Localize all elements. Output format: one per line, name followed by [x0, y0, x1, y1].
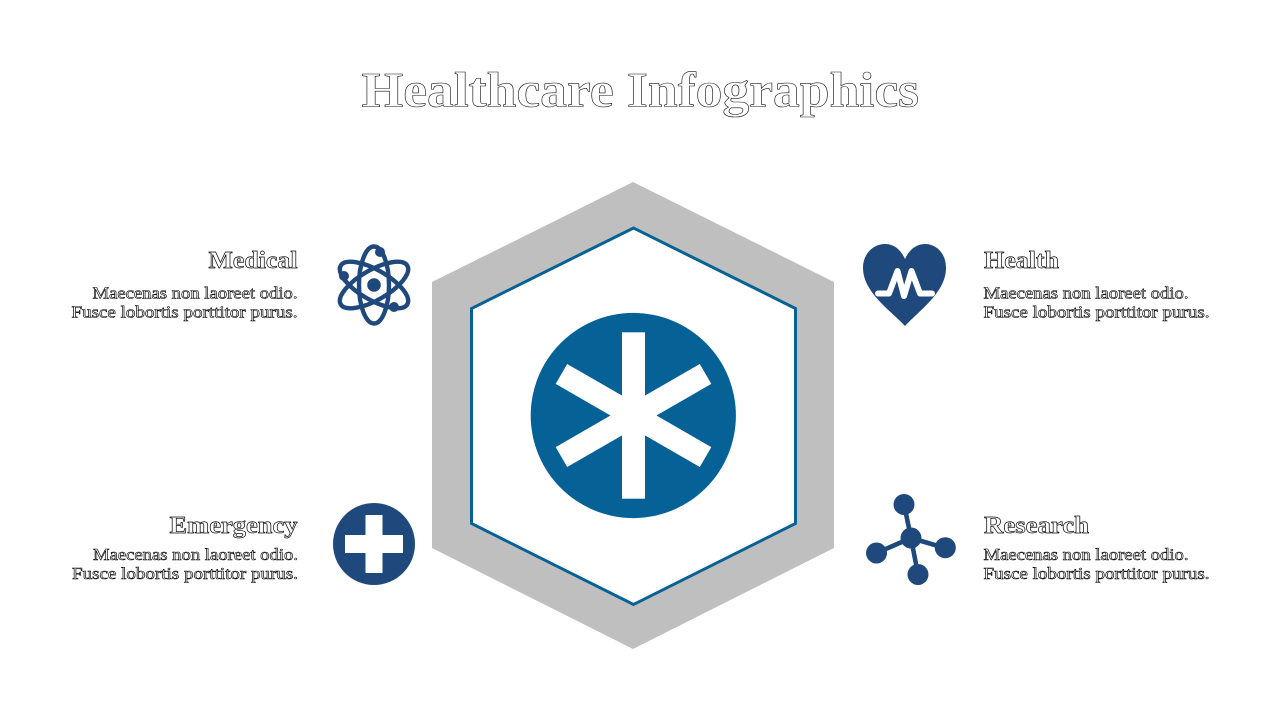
- icon: medical cross: [333, 503, 415, 585]
- text block: research: Maecenas non laoreet odio.: [984, 545, 1188, 564]
- panel: health: [863, 244, 1210, 326]
- panel: medical: [72, 246, 415, 324]
- heading: medical: Medical: [208, 248, 298, 274]
- text block: health: Fusce lobortis porttitor purus.: [984, 302, 1210, 322]
- panel: research: [866, 494, 1210, 585]
- central hexagon graphic: [432, 182, 834, 649]
- text block: health: [984, 284, 1210, 322]
- panel: emergency: [72, 503, 415, 585]
- icon: molecule: [866, 494, 956, 585]
- heading: health: Health: [984, 248, 1059, 274]
- outer grey hexagon: [432, 182, 834, 649]
- text block: research: [984, 545, 1210, 583]
- icon: atom: [333, 246, 415, 324]
- text block: research: Fusce lobortis porttitor purus.: [984, 564, 1210, 583]
- text block: health: Maecenas non laoreet odio.: [984, 284, 1188, 302]
- inner white hexagon: [472, 228, 796, 604]
- heading: emergency: Emergency: [170, 513, 298, 539]
- text block: medical: Fusce lobortis porttitor purus.: [72, 302, 298, 322]
- title: Healthcare Infographics: [362, 62, 919, 118]
- icon: heart with pulse: [863, 244, 946, 326]
- text block: medical: Maecenas non laoreet odio.: [92, 284, 298, 302]
- text block: emergency: Maecenas non laoreet odio.: [93, 545, 298, 564]
- icon: central medical asterisk: [531, 313, 736, 518]
- text block: emergency: Fusce lobortis porttitor purus.: [72, 564, 298, 583]
- text block: medical: [72, 284, 298, 322]
- heading: research: Research: [984, 513, 1089, 539]
- text block: emergency: [72, 545, 298, 583]
